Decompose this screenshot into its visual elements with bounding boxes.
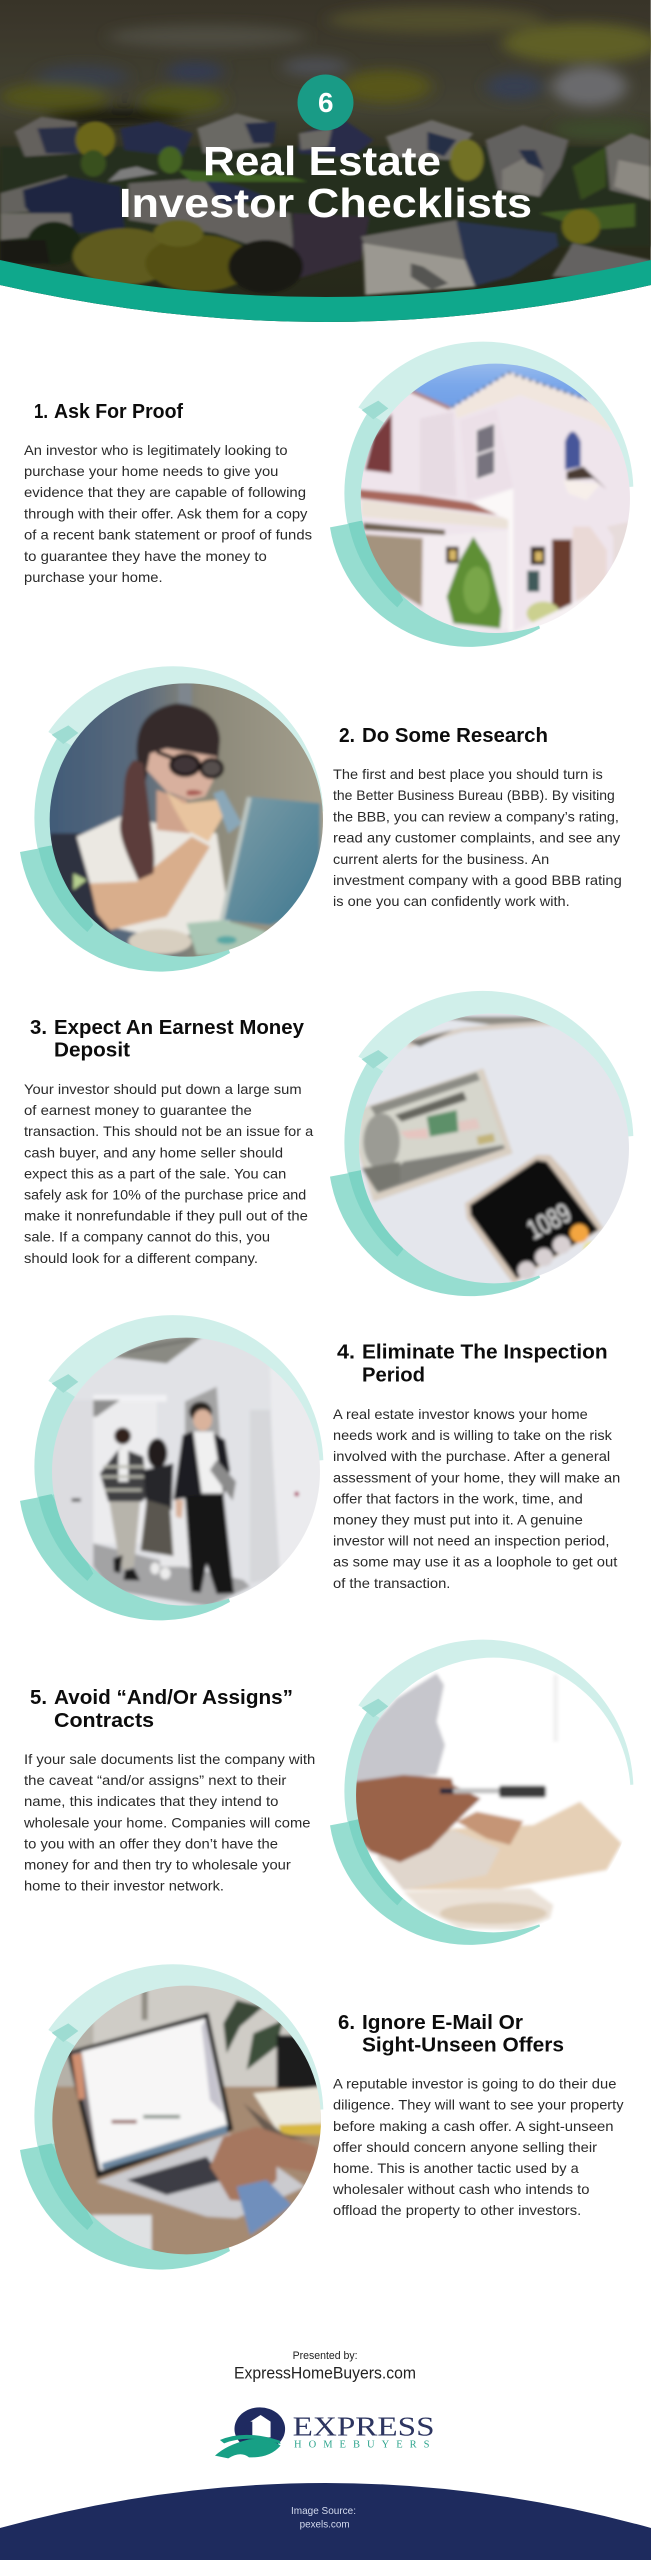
logo wordmark: EXPRESS [293, 2412, 435, 2442]
logo mark [215, 2407, 285, 2458]
teal wave band [0, 260, 651, 322]
body text 2: read any customer complaints, and see any [333, 830, 620, 846]
body text 4: as some may use it as a loophole to get out [333, 1554, 617, 1570]
heading 3: Deposit [54, 1039, 130, 1062]
logo: Express Homebuyers [215, 2407, 435, 2458]
body text 1: evidence that they are capable of following [24, 484, 306, 500]
body text 3: should look for a different company. [24, 1250, 258, 1266]
image source credit: pexels.com [300, 2518, 350, 2530]
body text 4: A real estate investor knows your home [333, 1406, 588, 1422]
heading 1: Ask For Proof [54, 400, 183, 423]
body text 4: offer that factors in the work, time, and [333, 1490, 583, 1506]
body text 2: the Better Business Bureau (BBB). By visiting [333, 787, 615, 803]
photo: cash and calculator phone: 1089 [522, 1197, 576, 1245]
heading 4 [337, 1341, 608, 1386]
body text 3: make it nonrefundable if they pull out of the [24, 1208, 308, 1224]
heading 4: Period [362, 1363, 425, 1386]
body text 6: home. This is another tactic used by a [333, 2160, 579, 2176]
heading 6: Ignore E-Mail Or [362, 2011, 523, 2034]
body text 5: name, this indicates that they intend to [24, 1793, 279, 1809]
body text 3: sale. If a company cannot do this, you [24, 1229, 270, 1245]
heading 6: 6. [338, 2011, 355, 2034]
body text 6: offload the property to other investors. [333, 2202, 581, 2218]
photo: woman at laptop [43, 677, 330, 963]
heading 5: 5. [30, 1686, 47, 1709]
heading 3 [30, 1016, 305, 1062]
title [119, 138, 532, 226]
body text 3 [24, 1081, 313, 1266]
body text 1: purchase your home. [24, 569, 163, 585]
body text 5: home to their investor network. [24, 1878, 224, 1894]
footer: presented by: ExpressHomeBuyers.com [234, 2364, 416, 2383]
heading 3: Expect An Earnest Money [54, 1016, 305, 1039]
decorative teal arcs 4 [20, 1315, 323, 1620]
decorative teal arcs 5 [330, 1640, 633, 1945]
logo wordmark [293, 2412, 435, 2450]
heading 1: 1. [34, 400, 48, 423]
body text 5: money for and then try to wholesale your [24, 1856, 291, 1872]
panel: step 5 and/or assigns contracts [23, 1640, 637, 1945]
body text 4: money they must put into it. A genuine [333, 1512, 583, 1528]
heading 4: 4. [337, 1341, 355, 1364]
body text 3: of earnest money to guarantee the [24, 1102, 252, 1118]
heading 5 [30, 1686, 293, 1732]
body text 4: assessment of your home, they will make an [333, 1469, 620, 1485]
photo: white stucco house [360, 364, 630, 633]
body text 4 [333, 1406, 620, 1591]
number badge: 6 [318, 87, 334, 118]
photo: laptop on desk [52, 1986, 321, 2254]
body text 4: investor will not need an inspection period, [333, 1533, 609, 1549]
body text 5 [23, 1751, 315, 1894]
body text 4: involved with the purchase. After a general [333, 1448, 610, 1464]
body text 6: before making a cash offer. A sight-unseen [333, 2118, 614, 2134]
body text 3: safely ask for 10% of the purchase price and [24, 1186, 306, 1202]
footer: presented by [234, 2350, 416, 2383]
body text 1: through with their offer. Ask them for a copy [24, 505, 307, 521]
panel: step 4 eliminate inspection period [20, 1315, 620, 1620]
heading 5: Avoid “And/Or Assigns” [54, 1686, 293, 1709]
body text 2: The first and best place you should turn is [333, 766, 603, 782]
heading 2: Do Some Research [362, 724, 548, 747]
heading 5: Contracts [54, 1709, 154, 1732]
decorative teal arcs 2 [20, 666, 323, 972]
body text 3: Your investor should put down a large sum [24, 1081, 302, 1097]
body text 6 [332, 2076, 624, 2218]
panel: step 1 ask for proof [24, 342, 640, 647]
panel: step 2 do some research [20, 666, 622, 972]
body text 5: If your sale documents list the company with [24, 1751, 315, 1767]
title: Real Estate [203, 138, 441, 184]
photo: cash and calculator phone [359, 1014, 629, 1284]
body text 2 [333, 766, 622, 909]
decorative teal arcs 3 [330, 991, 633, 1296]
number badge [298, 74, 354, 130]
panel: step 3 earnest money deposit [24, 991, 640, 1296]
body text 6: A reputable investor is going to do their due [333, 2076, 617, 2092]
body text 3: transaction. This should not be an issue for a [24, 1123, 313, 1139]
decorative teal arcs 1 [330, 342, 633, 647]
header [0, 0, 651, 322]
body text 5: to you with an offer they don’t have the [24, 1835, 278, 1851]
heading 6 [338, 2011, 564, 2056]
body text 2: is one you can confidently work with. [333, 893, 570, 909]
image source credit: Image Source: [291, 2505, 356, 2517]
body text 2: investment company with a good BBB rating [333, 872, 622, 888]
body text 2: current alerts for the business. An [333, 851, 549, 867]
photo: agent and buyers walking [52, 1338, 320, 1606]
body text 1: of a recent bank statement or proof of funds [24, 527, 312, 543]
heading 2: 2. [339, 724, 355, 747]
body text 1: to guarantee they have the money to [24, 548, 267, 564]
body text 4: needs work and is willing to take on the risk [333, 1427, 613, 1443]
heading 3: 3. [30, 1016, 47, 1039]
body text 6: offer should concern anyone selling their [333, 2139, 597, 2155]
body text 6: wholesaler without cash who intends to [332, 2181, 590, 2197]
photo: hand with pen over paper [350, 1652, 637, 1938]
heading 6: Sight-Unseen Offers [362, 2034, 564, 2056]
header photo: neighbourhood [0, 0, 651, 322]
body text 5: wholesale your home. Companies will come [23, 1814, 311, 1830]
body text 5: the caveat “and/or assigns” next to their [24, 1772, 287, 1788]
body text 2: the BBB, you can review a company’s rating, [333, 808, 619, 824]
title: Investor Checklists [119, 180, 532, 226]
body text 1 [24, 442, 312, 585]
footer: presented by: Presented by: [293, 2350, 358, 2362]
panel: step 6 ignore email or sight-unseen offers [20, 1964, 624, 2270]
body text 4: of the transaction. [333, 1575, 450, 1591]
heading 4: Eliminate The Inspection [362, 1341, 608, 1364]
body text 3: cash buyer, and any home seller should [24, 1144, 283, 1160]
footer navy wave [0, 2483, 651, 2560]
body text 6: diligence. They will want to see your property [333, 2097, 624, 2113]
logo wordmark: HOMEBUYERS [294, 2440, 430, 2450]
image source credit [291, 2505, 356, 2530]
body text 3: expect this as a part of the sale. You can [24, 1165, 286, 1181]
body text 1: purchase your home needs to give you [24, 463, 278, 479]
decorative teal arcs 6 [20, 1964, 323, 2270]
body text 1: An investor who is legitimately looking to [24, 442, 288, 458]
